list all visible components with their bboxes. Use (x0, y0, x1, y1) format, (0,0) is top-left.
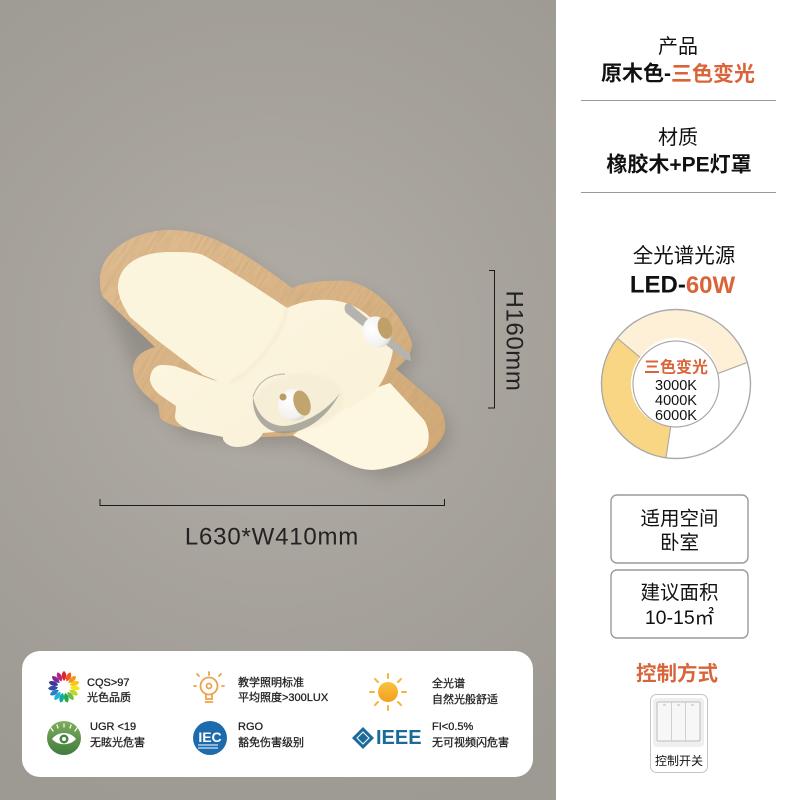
chart: colour temperature donut (602, 310, 750, 458)
text: lighting standard: 平均照度>300LUX (238, 690, 329, 704)
dimension: length and width (100, 499, 444, 550)
box: applicable space: 卧室 (660, 532, 699, 554)
text: RGO: 豁免伤害级别 (238, 735, 304, 749)
icon: wall switch (650, 694, 708, 772)
text: FI: FI<0.5% (432, 721, 473, 733)
text: material: 材质 (658, 126, 698, 149)
chart labels (644, 358, 708, 424)
text: full spectrum: 自然光般舒适 (432, 692, 498, 706)
dimension: length and width: L630*W410mm (185, 524, 359, 550)
text: material (606, 126, 752, 176)
box: recommended area: 建议面积 (640, 582, 719, 604)
icon: IEC (193, 721, 227, 755)
text: RGO (238, 721, 304, 749)
text: CQS (87, 677, 131, 704)
text: UGR: UGR <19 (90, 721, 136, 733)
text: light source (630, 244, 736, 298)
lamp shadow (104, 238, 449, 478)
box: applicable space: 适用空间 (640, 508, 719, 530)
text: product: 原木色-三色变光 (601, 62, 755, 86)
icon: IEEE logo (352, 727, 422, 749)
text: lighting standard: 教学照明标准 (238, 675, 304, 689)
fuselage (150, 300, 393, 447)
icon: IEEE logo: IEEE (376, 727, 422, 749)
text: product (601, 35, 755, 86)
switch caption: 控制开关 (655, 754, 703, 768)
lamp: airplane ceiling light (100, 230, 452, 480)
fuselage shading (230, 308, 287, 383)
heading: control mode: 控制方式 (636, 662, 718, 686)
text: UGR (90, 721, 145, 749)
segment: white (602, 310, 750, 458)
box: recommended area (611, 570, 748, 638)
text: full spectrum: 全光谱 (432, 676, 465, 690)
text: CQS: CQS>97 (87, 677, 130, 689)
text: light source: 全光谱光源 (633, 244, 735, 268)
text: UGR: 无眩光危害 (90, 735, 145, 749)
icon: eye (47, 721, 81, 755)
text: RGO: RGO (238, 721, 264, 733)
text: light source: LED-60W (630, 272, 736, 298)
upper wing (118, 252, 300, 384)
chart labels: 3000K (655, 378, 697, 394)
text: CQS: 光色品质 (87, 690, 131, 704)
wood grain (102, 230, 424, 456)
text: FI: 无可视频闪危害 (432, 735, 509, 749)
panel: spec column (556, 0, 800, 800)
propeller (345, 303, 411, 361)
chart labels: 6000K (655, 408, 697, 424)
text: FI (432, 721, 509, 749)
icon: light bulb (194, 672, 224, 702)
divider (581, 100, 776, 101)
chart labels: 三色变光 (644, 358, 708, 376)
chart labels: 4000K (655, 393, 697, 409)
dimension: height: H160mm (500, 291, 528, 391)
box: recommended area: 10-15㎡ (645, 606, 715, 629)
wood frame (100, 230, 445, 470)
lower wing (293, 383, 429, 470)
icon: sun (370, 674, 406, 710)
card: certifications (22, 651, 533, 777)
segment: gold (602, 338, 671, 458)
panel: photo background (0, 0, 556, 800)
icon: IEC: IEC (198, 729, 222, 745)
text: product: 产品 (658, 35, 698, 58)
segment: warm cream (617, 310, 747, 373)
cockpit bubble (249, 368, 347, 436)
text: lighting standard (238, 675, 329, 704)
text: material: 橡胶木+PE灯罩 (606, 152, 752, 176)
box: applicable space (611, 495, 748, 563)
dimension: height (488, 270, 528, 408)
icon: colour wheel (48, 671, 80, 703)
text: full spectrum (432, 676, 498, 706)
